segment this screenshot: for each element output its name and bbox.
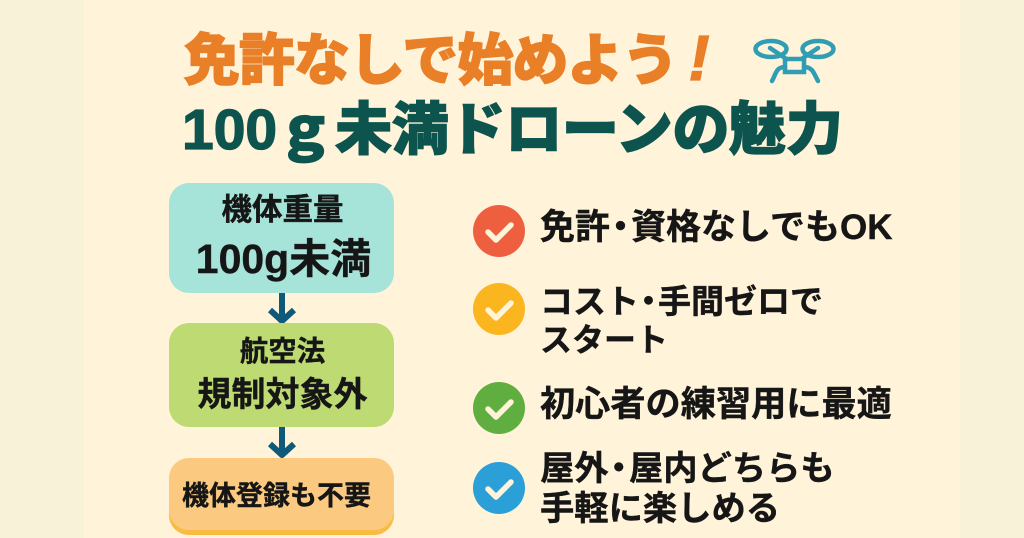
icon: red check [473,205,525,257]
benefit 3: 初心者の練習用に最適 [540,385,892,424]
icon: drone [753,38,836,84]
benefit 2 [540,283,823,358]
icon: blue check [473,462,525,514]
panel: weight [169,183,394,293]
benefit 4 [540,450,835,528]
title line 1: 免許なしで始めよう [184,29,677,92]
benefit 2: スタート [540,322,668,358]
icon: yellow check [473,283,525,335]
registration text: 機体登録も不要 [182,481,371,511]
benefit 4: 手軽に楽しめる [540,490,780,528]
benefit 4: 屋外・屋内どちらも [540,450,835,488]
benefit 2: コスト・手間ゼロで [540,283,823,320]
arrow 2 [268,427,296,458]
title line 2: 100ｇ未満ドローンの魅力 [182,98,843,162]
panel: registration [169,458,394,535]
law label: 航空法 [240,336,325,368]
title line 1: ! [688,22,709,94]
law value: 規制対象外 [198,376,368,414]
weight value: 100g未満 [196,236,371,282]
icon: green check [473,382,525,434]
weight label: 機体重量 [222,193,344,227]
benefit 1: 免許・資格なしでもOK [540,208,892,247]
panel: aviation law [169,323,394,427]
arrow 1 [268,293,296,323]
